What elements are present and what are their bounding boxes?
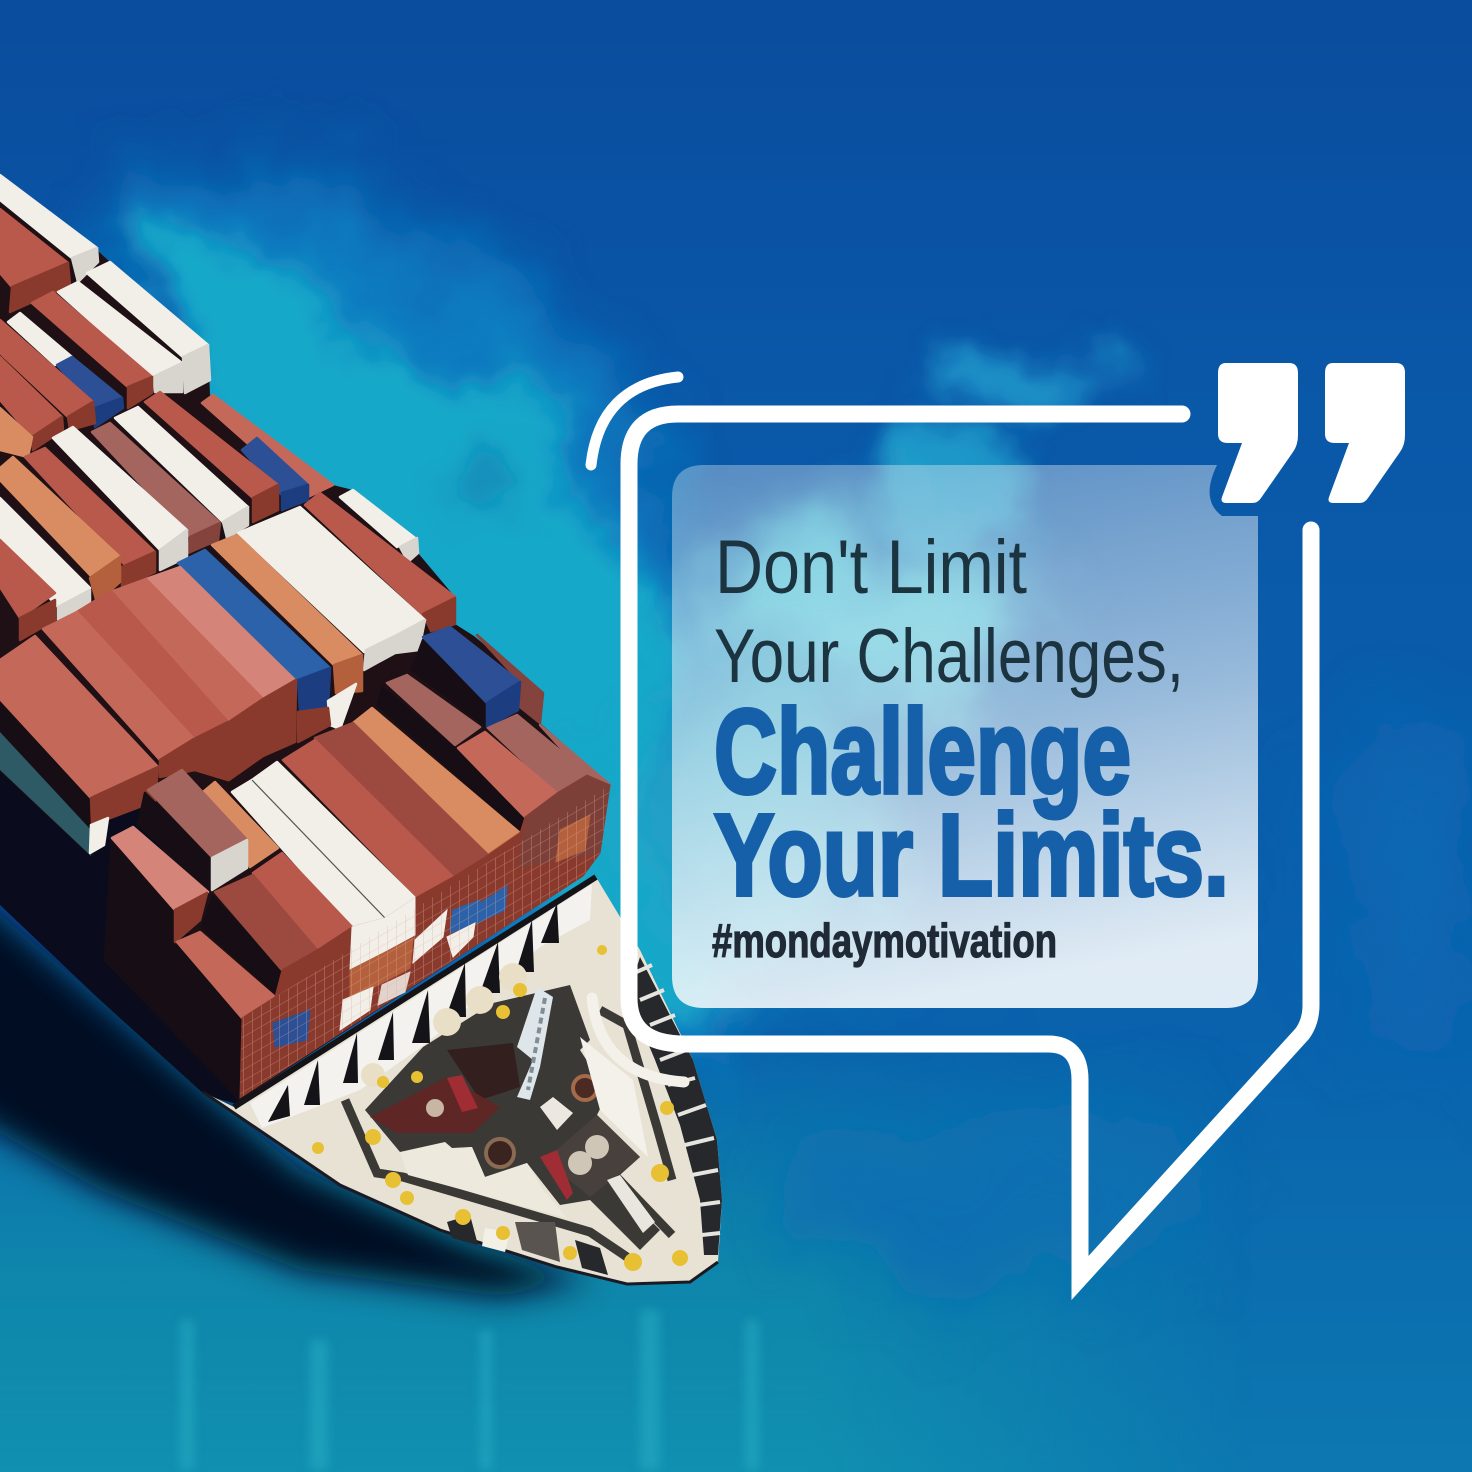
bow front fittings bbox=[447, 1215, 608, 1275]
container ship bbox=[0, 175, 1405, 1284]
bow deck bbox=[203, 877, 722, 1284]
line: Challenge: Challenge bbox=[714, 685, 1131, 819]
line: Your Limits.: Your Limits. bbox=[714, 790, 1229, 920]
deck plates bbox=[400, 1142, 567, 1218]
middle container rows bbox=[0, 490, 455, 856]
right quote mark bbox=[1325, 363, 1405, 503]
bow rail bbox=[628, 957, 722, 1255]
left quote mark bbox=[1218, 363, 1298, 503]
speech bubble frame bbox=[591, 377, 1311, 1278]
lower left accent arc bbox=[592, 998, 684, 1082]
quote card bbox=[672, 465, 1258, 1008]
upper left accent arc bbox=[591, 377, 678, 465]
mast bbox=[517, 987, 553, 1100]
forward machinery bbox=[447, 1043, 520, 1100]
container end faces bbox=[240, 775, 610, 1098]
container stack underlay bbox=[0, 175, 610, 1100]
dark deck plating bbox=[365, 985, 660, 1250]
upper container rows bbox=[0, 175, 333, 640]
bubble outline bbox=[629, 414, 1311, 1278]
ship hull shadow on water bbox=[0, 880, 590, 1296]
line: Don't Limit: Don't Limit bbox=[715, 525, 1027, 610]
breakwater teeth bbox=[268, 903, 559, 1122]
forward container rows bbox=[105, 627, 610, 1100]
closing quotation marks bbox=[1218, 363, 1405, 503]
line: Your Challenges,: Your Challenges, bbox=[714, 614, 1184, 699]
breakwater band bbox=[250, 884, 592, 1128]
deck walkways bbox=[345, 1010, 672, 1257]
quote text bbox=[712, 525, 1229, 967]
hashtag: #mondaymotivation bbox=[712, 914, 1057, 967]
beige deck circles bbox=[361, 963, 527, 1087]
ship hull side bbox=[0, 700, 280, 1105]
yellow deck fittings bbox=[312, 945, 688, 1271]
